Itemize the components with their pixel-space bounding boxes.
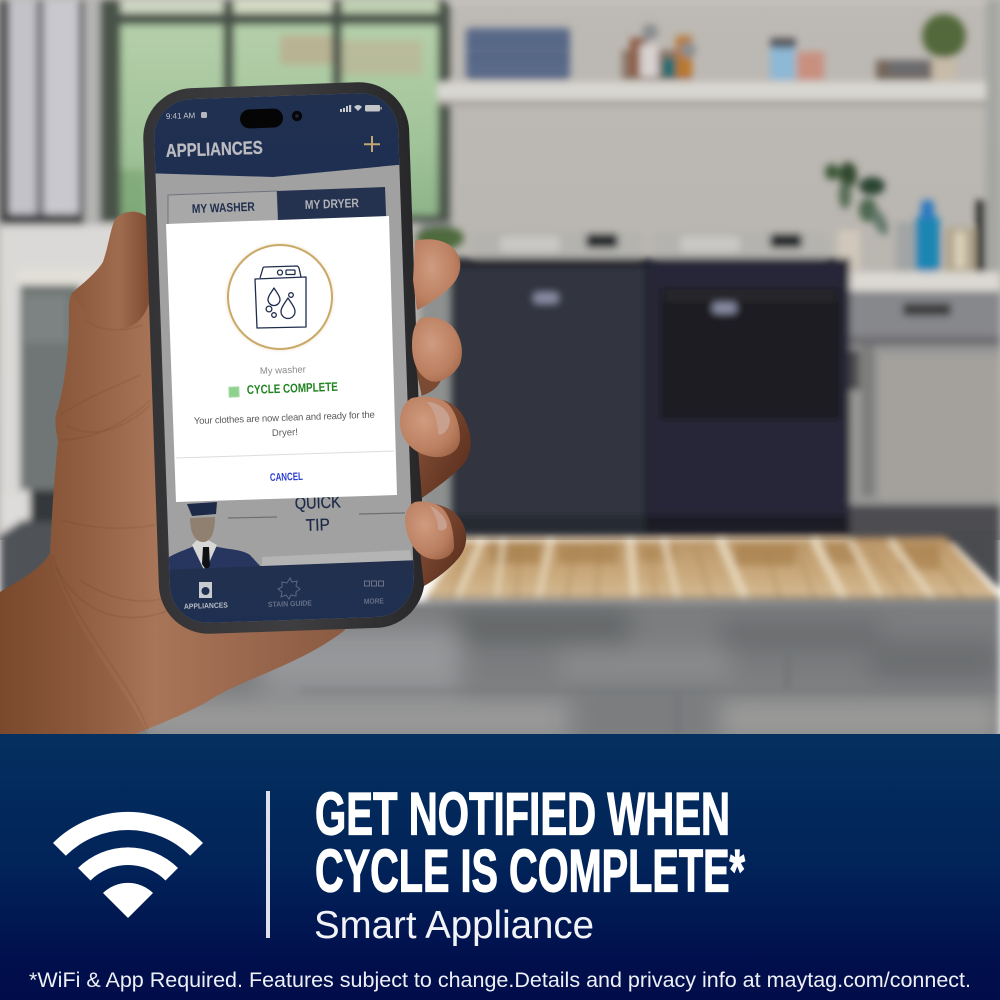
arm shading xyxy=(0,553,148,734)
phone frame xyxy=(142,81,426,635)
nav: appliances: APPLIANCES xyxy=(184,600,228,611)
bottom navy banner xyxy=(0,734,1000,1000)
quick tip heading: TIP xyxy=(305,515,330,535)
signal bars xyxy=(340,105,351,112)
battery xyxy=(365,105,382,112)
fingers wrapping phone xyxy=(400,239,471,586)
notification dialog xyxy=(166,216,397,502)
nav: stain guide xyxy=(268,578,312,609)
cycle complete status: CYCLE COMPLETE xyxy=(247,380,338,397)
background: blurred laundry room photo xyxy=(0,0,1000,742)
woven rug xyxy=(420,535,1000,605)
area between phone and washer xyxy=(420,222,452,542)
dryer tab xyxy=(277,187,386,220)
wifi status icon xyxy=(354,105,362,111)
dryer tab: MY DRYER xyxy=(305,196,359,212)
counter plant and bottles xyxy=(825,162,985,273)
stone floor xyxy=(135,596,1000,734)
screen background xyxy=(154,93,414,623)
status square xyxy=(229,387,239,397)
nav: more: MORE xyxy=(364,596,384,606)
ring finger xyxy=(400,397,471,498)
status alert icon xyxy=(201,112,207,118)
washer top xyxy=(472,232,828,258)
headline xyxy=(315,780,745,904)
dialog message: Your clothes are now clean and ready for the xyxy=(194,410,375,427)
dialog divider xyxy=(176,451,394,458)
quick tip dividers xyxy=(228,513,405,518)
nav: stain guide: STAIN GUIDE xyxy=(268,598,312,609)
smartphone xyxy=(140,60,430,640)
palm and arm xyxy=(0,212,345,734)
dialog label: My washer xyxy=(260,364,306,377)
status time: 9:41 AM xyxy=(166,111,196,121)
app header xyxy=(154,93,400,177)
cancel button: CANCEL xyxy=(270,471,303,484)
quick tip heading: QUICK xyxy=(294,492,342,513)
right counter and cabinets xyxy=(848,272,1000,590)
washer and dryer bodies xyxy=(450,258,850,536)
add icon xyxy=(364,136,380,152)
spokesperson illustration xyxy=(167,502,262,574)
washer tab: MY WASHER xyxy=(192,200,255,216)
quick tip heading xyxy=(295,496,341,531)
footer highlight xyxy=(262,550,412,566)
gold ring xyxy=(228,245,332,349)
upper and main shelves xyxy=(438,0,1000,280)
shelf items xyxy=(466,14,966,80)
vertical divider xyxy=(266,791,270,938)
left wall, counter and cabinet xyxy=(0,225,155,605)
wifi icon xyxy=(53,812,203,918)
washer icon xyxy=(255,266,306,328)
footnote: *WiFi & App Required. Features subject to change.Details and privacy info at maytag.com/connect. xyxy=(29,968,971,992)
bottom navigation bar xyxy=(169,560,414,623)
nav: appliances xyxy=(184,582,228,611)
left blinds window xyxy=(0,0,102,225)
headline: CYCLE IS COMPLETE* xyxy=(315,838,745,904)
plant by window xyxy=(416,226,464,250)
green garden window xyxy=(100,0,450,222)
nav: more xyxy=(364,581,384,606)
phone screen xyxy=(154,93,414,623)
dialog message xyxy=(194,410,375,439)
dialog message: Dryer! xyxy=(272,427,298,439)
subheading: Smart Appliance xyxy=(314,904,594,947)
little finger xyxy=(405,501,466,586)
front camera xyxy=(292,111,302,121)
index finger xyxy=(413,239,460,310)
washer tab xyxy=(168,190,278,224)
hand holding phone xyxy=(0,212,345,734)
wall xyxy=(0,0,1000,540)
dynamic island xyxy=(240,108,283,129)
app title: APPLIANCES xyxy=(165,137,263,161)
thumb tip xyxy=(72,212,150,330)
middle finger xyxy=(412,317,462,396)
headline: GET NOTIFIED WHEN xyxy=(315,780,730,848)
hand creases xyxy=(52,320,170,730)
